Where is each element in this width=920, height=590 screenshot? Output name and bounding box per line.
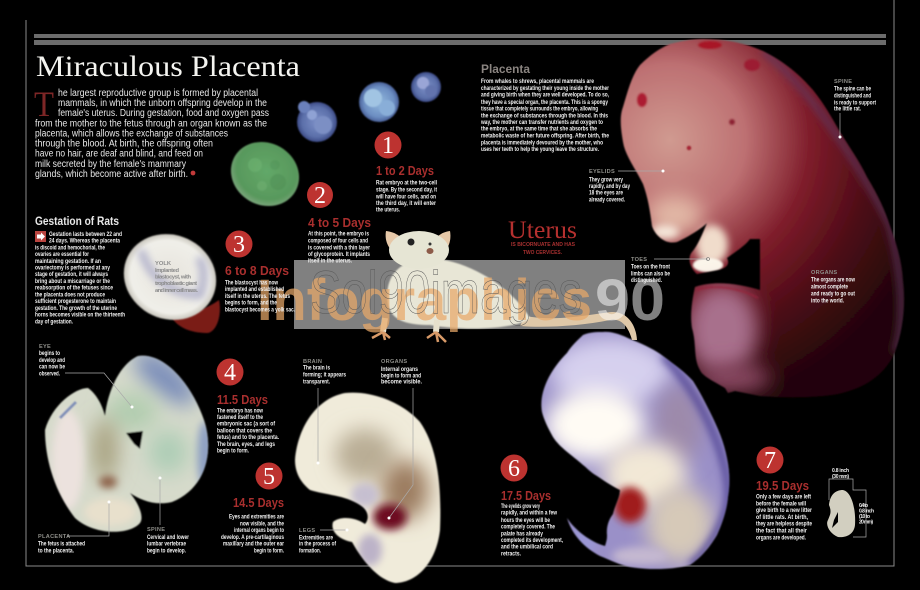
intro text block: he largest reproductive group is formed by placental (58, 88, 258, 99)
panel: placenta text: the embryo, at the same time that she absorbs the (481, 126, 597, 133)
stage 7: Only a few days are left (756, 493, 812, 500)
stage 2: itself in the uterus. (308, 257, 352, 264)
panel: placenta text: way, the mother can transfer nutrients and oxygen to (480, 119, 603, 126)
size diagram: fetus at actual size: 0.8 inch (859, 508, 874, 514)
stage 5: maxillary and the outer ear (223, 540, 284, 547)
stage 2 (307, 182, 371, 264)
callout: spine 19.5: SPINE (834, 79, 852, 85)
stage 7: they are helpless despite (756, 520, 812, 527)
callout: legs: formation. (299, 547, 321, 554)
callout: spine 19.5 (834, 79, 877, 138)
text block: gestation of rats: the placenta does not produce (35, 291, 105, 298)
panel: placenta text: metabolic waste of her future offspring. After birth, the (481, 132, 609, 140)
text block: gestation of rats: horns becomes visible on the thirteenth (35, 312, 125, 318)
heading: uterus: TWO CERVICES. (523, 250, 562, 256)
stage 1: the third day, it will enter (376, 200, 436, 207)
watermark text: 90 (595, 268, 665, 333)
number badge: 7 (764, 448, 776, 474)
callout: brain (303, 359, 346, 464)
stage 4: embryonic sac (a sort of (217, 420, 276, 427)
stage 1: the uterus. (376, 206, 400, 213)
stage 1: will have four cells, and on (375, 193, 436, 200)
callout: eye: can now be (39, 364, 65, 371)
cell: four-cell (297, 101, 337, 142)
callout: eye: observed. (39, 371, 60, 378)
stage 3: The blastocyst has now (225, 279, 279, 286)
size diagram: fetus at actual size (827, 468, 874, 537)
label: yolk: YOLK (155, 261, 172, 267)
photo: green blastocyst (219, 130, 311, 218)
cell: two-cell (359, 82, 399, 122)
photo: 14.5-day embryo (295, 393, 440, 583)
callout: brain: forming; it appears (303, 371, 346, 378)
heading: uterus (508, 217, 577, 256)
panel: placenta text (480, 62, 609, 153)
stage 5: begin to form. (254, 547, 284, 554)
callout: eyelids: They grow very (589, 176, 623, 183)
text block: gestation of rats: maintaining gestation. If an (35, 258, 101, 265)
text block: gestation of rats: 24 days. Whereas the placenta (49, 238, 120, 245)
callout: brain: BRAIN (303, 359, 322, 365)
callout: toes: distinguished. (631, 277, 662, 284)
number badge: 5 (263, 464, 275, 490)
size diagram: fetus at actual size: 20 mm) (859, 520, 873, 526)
number badge: 1 (382, 133, 394, 159)
watermark text: Infographics (257, 268, 592, 333)
heading: uterus: Uterus (508, 217, 577, 244)
callout: organs 19.5 (811, 270, 856, 304)
callout: placenta (38, 500, 110, 554)
stage 2: At this point, the embryo is (308, 230, 369, 237)
icon: red arrow square (35, 231, 46, 242)
callout: spine 11.5: begin to develop. (147, 547, 186, 554)
size diagram: fetus at actual size: (10 to (859, 514, 870, 520)
panel: placenta text: the exchange of substances through the blood. In this (481, 112, 608, 119)
callout: organs 19.5: almost complete (811, 283, 848, 290)
intro text block: female's uterus. During gestation, food and oxygen pass (58, 108, 269, 119)
watermark band (294, 260, 625, 329)
photo: yolk sac disc (110, 219, 230, 335)
stage 2: composed of four cells and (308, 237, 368, 244)
callout: placenta: PLACENTA (38, 534, 70, 540)
label: yolk: Implanted (155, 268, 179, 274)
intro text block: placenta, which allows the exchange of substances (35, 128, 228, 140)
stage 5 (221, 462, 284, 554)
stage 7: give birth to a new litter (756, 507, 812, 514)
stage 4 (216, 358, 279, 454)
stage 3: blastocyst becomes a yolk sac. (225, 306, 295, 313)
stage 2: of glycoprotein. It implants (308, 251, 370, 258)
stage 7 (756, 446, 812, 541)
callout: spine 11.5 (147, 476, 189, 554)
text block: gestation of rats: Gestation lasts between 22 and (49, 231, 122, 238)
stage 4: balloon that covers the (217, 427, 272, 434)
callout: placenta: The fetus is attached (38, 540, 85, 547)
stage 3 (225, 230, 295, 313)
stage 4: The brain, eyes, and legs (217, 441, 275, 448)
stage 3: 6 to 8 Days (225, 263, 289, 278)
watermark text: Sol90images (310, 259, 582, 326)
text block: gestation of rats: bring about a miscarriage or the (35, 278, 110, 285)
heading: gestation of rats: Gestation of Rats (35, 216, 119, 228)
text block: gestation of rats: is discoid and hemochorial, the (35, 244, 105, 251)
stage 7: before the female will (756, 500, 806, 507)
callout: eyelids: EYELIDS (589, 169, 615, 175)
size diagram: fetus at actual size: 0.4 to (859, 503, 868, 509)
stage 4: fetus) and to the placenta. (217, 434, 279, 441)
stage 1: 1 to 2 Days (376, 163, 434, 178)
intro text block: have no hair, are deaf and blind, and feed on (35, 148, 203, 160)
callout: toes: Toes on the front (631, 263, 671, 270)
stage 6 (500, 454, 563, 557)
intro text block: mammals, in which the unborn offspring develop in the (58, 98, 267, 109)
panel: placenta text: tissue that completely surrounds the embryo, allowing (481, 106, 598, 113)
callout: toes: limbs can also be (631, 270, 670, 277)
callout: legs: Extremities are (299, 534, 333, 541)
callout: eyelids: already covered. (589, 196, 625, 203)
callout: spine 19.5: distinguished and (834, 92, 871, 99)
text block: gestation of rats (35, 231, 125, 326)
label: yolk: and inner cell mass. (155, 288, 198, 294)
stage 1 (374, 132, 438, 213)
callout: brain: transparent. (303, 378, 330, 385)
callout: legs: LEGS (299, 528, 315, 534)
callout: organs 19.5: ORGANS (811, 270, 837, 276)
label: yolk: blastocyst, with (155, 274, 191, 280)
stage 6: palate has already (501, 530, 543, 537)
text block: gestation of rats: reabsorption of the fetuses since (35, 285, 113, 292)
size diagram: fetus at actual size: (30 mm) (832, 474, 849, 480)
stage 6: completely covered. The (501, 523, 555, 530)
stage 7: of little rats. At birth, (756, 514, 808, 521)
callout: spine 19.5: the little rat. (834, 105, 861, 112)
callout: spine 19.5: is ready to support (834, 99, 877, 106)
callout: legs: in the process of (299, 540, 337, 547)
title: Miraculous Placenta (36, 50, 300, 83)
heading: placenta: Placenta (481, 62, 530, 76)
callout: eye: develop and (39, 357, 65, 364)
callout: eye: EYE (39, 344, 51, 350)
photo: 11.5-day embryo (45, 341, 213, 532)
intro text block: from the mother to the fetus through an organ known as the (35, 118, 267, 130)
number badge: 2 (314, 183, 326, 209)
callout: organs 14.5: ORGANS (381, 359, 407, 365)
intro text block: glands, which become active after birth. (35, 169, 188, 180)
callout: organs 19.5: and ready to go out (811, 290, 856, 297)
callout: brain: The brain is (303, 364, 330, 371)
stage 6: completed its development, (501, 537, 563, 544)
text block: gestation of rats: sufficient progesterone to maintain (35, 298, 116, 305)
text block: gestation of rats: stage of gestation, it will always (35, 271, 108, 278)
stage 1: stage. By the second day, it (376, 186, 438, 193)
callout: organs 19.5: into the world. (811, 297, 844, 304)
stage 5: develop. A pre-cartilaginous (221, 534, 284, 541)
callout: toes: TOES (631, 257, 647, 263)
panel: placenta text: From whales to shrews, placental mammals are (481, 78, 594, 85)
number badge: 3 (233, 232, 245, 258)
stage 6: retracts. (501, 550, 521, 557)
stage 4: 11.5 Days (217, 392, 268, 407)
photo: rat (372, 231, 637, 342)
intro text block: through the blood. At birth, the offspring often (35, 138, 213, 150)
stage 6: 17.5 Days (501, 488, 551, 503)
stage 6: and the umbilical cord (501, 544, 553, 551)
intro text block: milk secreted by the female's mammary (35, 159, 186, 170)
text block: gestation of rats: ovariectomy is performed at any (35, 264, 110, 272)
photo: two-cell embryo cluster (297, 72, 441, 142)
callout: spine 11.5: lumbar vertebrae (147, 540, 186, 547)
stage 2: 4 to 5 Days (308, 215, 371, 230)
drop cap: T (34, 84, 54, 124)
callout: eye: begins to (39, 350, 60, 357)
size diagram: fetus at actual size: 0.8 inch (832, 468, 849, 474)
stage 4: begin to form. (217, 447, 249, 454)
stage 4: fastened itself to the (217, 414, 263, 421)
stage 7: organs are developed. (756, 534, 806, 541)
panel: placenta text: placenta is immediately devoured by the mother, who (481, 139, 603, 146)
callout: eyelids (589, 169, 664, 203)
text block: gestation of rats: ovaries are essential for (35, 251, 89, 258)
callout: placenta: to the placenta. (38, 547, 74, 554)
stage 2: is covered with a thin layer (308, 244, 370, 251)
stage 5: 14.5 Days (233, 495, 284, 510)
callout: eyelids: 18 the eyes are (589, 189, 623, 196)
text block: gestation of rats: gestation. The growth of the uterine (35, 305, 117, 312)
panel: placenta text: characterized by gestating their young inside the mother (481, 85, 609, 92)
stage 7: 19.5 Days (756, 478, 809, 493)
callout: spine 19.5: The spine can be (834, 85, 871, 92)
callout: eye (39, 344, 134, 408)
callout: organs 14.5: begin to form and (381, 372, 421, 379)
stage 5: Eyes and extremities are (229, 513, 284, 520)
label: yolk: trophoblastic giant (155, 281, 197, 287)
photo: 17.5-day fetus (541, 332, 729, 569)
cell: single (411, 72, 441, 102)
callout: legs (299, 528, 348, 554)
stage 6: The eyelids grow very (501, 503, 540, 510)
heading: uterus: IS BICORNUATE AND HAS (511, 242, 575, 248)
stage 3: itself in the uterus. The fetus (225, 293, 290, 300)
stage 7: the fact that all their (756, 527, 807, 534)
panel: placenta text: uses her teeth to help the young leave the structure. (481, 146, 599, 153)
panel: placenta text: they have a special organ, the placenta. This is a spongy (481, 99, 608, 106)
callout: toes (631, 257, 710, 284)
callout: eyelids: rapidly, and by day (589, 183, 630, 190)
text block: gestation of rats: day of gestation. (35, 318, 73, 326)
photo: 19.5-day fetus (621, 39, 904, 397)
callout: spine 11.5: SPINE (147, 527, 165, 533)
stage 4: The embryo has now (217, 407, 264, 414)
callout: organs 14.5: Internal organs (381, 366, 418, 373)
stage 5: internal organs begin to (234, 527, 284, 534)
stage 3: begins to form, and the (225, 299, 277, 306)
label: yolk (155, 261, 198, 294)
intro text block (34, 84, 269, 180)
stage 3: implanted and established (225, 286, 284, 293)
callout: organs 14.5: become visible. (381, 378, 422, 385)
number badge: 4 (224, 360, 236, 386)
stage 6: rapidly, and within a few (501, 509, 558, 516)
stage 1: Rat embryo at the two-cell (376, 179, 437, 186)
stage 6: hours the eyes will be (501, 517, 550, 524)
callout: organs 14.5 (381, 359, 422, 520)
callout: organs 19.5: The organs are now (811, 276, 856, 283)
stage 5: now visible, and the (240, 520, 284, 527)
number badge: 6 (508, 456, 520, 482)
callout: spine 11.5: Cervical and lower (147, 534, 189, 541)
panel: placenta text: and giving birth when they are well developed. To do so, (481, 92, 609, 99)
